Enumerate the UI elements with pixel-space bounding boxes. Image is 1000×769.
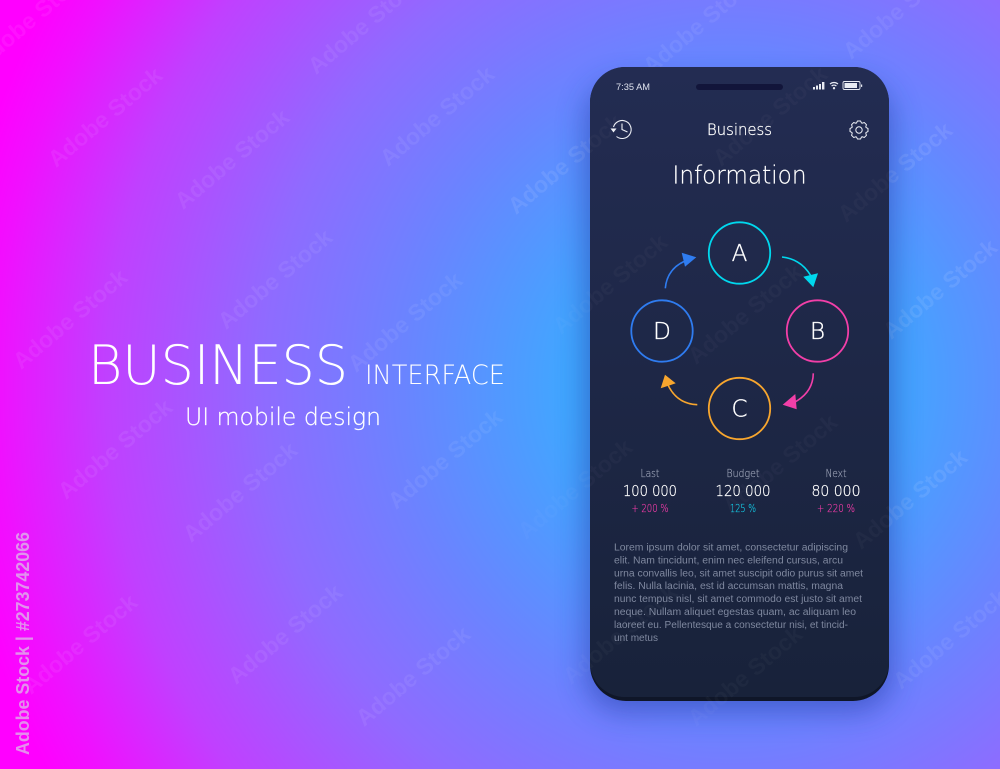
arrow: D to A (665, 253, 696, 288)
watermark pattern: background: Adobe Stock (213, 224, 337, 334)
watermark pattern: over phone: Adobe Stock (683, 621, 807, 731)
subtitle: INTERFACE: INTERFACE (365, 360, 505, 391)
watermark pattern: over phone: Adobe Stock (708, 61, 832, 171)
watermark pattern: background: Adobe Stock (8, 264, 132, 374)
tagline: UI mobile design (185, 403, 381, 431)
stat: last: Last (640, 468, 660, 480)
node C: C (731, 396, 748, 422)
stats row (623, 468, 860, 515)
node A: A (732, 241, 747, 267)
arrow: A to B (782, 257, 818, 287)
stat: budget (716, 468, 770, 515)
status bar time: 7:35 AM (616, 82, 650, 93)
arrow: B to C (783, 373, 813, 409)
watermark pattern: background: Adobe Stock (18, 589, 142, 699)
body paragraph: elit. Nam tincidunt, enim nec eleifend cursus, arcu (614, 556, 843, 566)
screen heading: Information (672, 160, 806, 190)
body paragraph (614, 542, 863, 644)
watermark pattern: over phone: Adobe Stock (833, 117, 957, 227)
screen title: Business (707, 120, 772, 139)
watermark pattern: over phone: Adobe Stock (878, 234, 1000, 344)
watermark pattern: over phone: Adobe Stock (513, 434, 637, 544)
arrow: C to D (661, 375, 697, 405)
stat: last: + 200 % (632, 503, 669, 515)
watermark pattern: background: Adobe Stock (383, 404, 507, 514)
node A (709, 222, 770, 284)
body paragraph: laoreet eu. Pellentesque a consectetur nisi, et tincid- (614, 620, 848, 631)
watermark pattern: over phone (503, 61, 1000, 731)
watermark pattern: background: Adobe Stock (178, 437, 302, 547)
phone mockup (590, 67, 889, 701)
body paragraph: felis. Nulla lacinia, est id accumsan mattis, magna (614, 581, 843, 592)
watermark pattern: background: Adobe Stock (43, 62, 167, 172)
watermark pattern: background: Adobe Stock (503, 109, 627, 219)
body paragraph: urna convallis leo, sit amet suscipit odio purus sit amet (614, 568, 863, 580)
watermark pattern: background: Adobe Stock (375, 61, 499, 171)
watermark pattern: background: Adobe Stock (343, 267, 467, 377)
stat: next: Next (826, 468, 846, 480)
node D: D (653, 319, 671, 345)
stat: last: 100 000 (623, 482, 677, 500)
cycle diagram (631, 222, 848, 439)
body paragraph: unt metus (614, 633, 658, 644)
stat: next: + 220 % (817, 503, 855, 515)
stat: next (812, 468, 860, 515)
stat: budget: 125 % (730, 503, 756, 515)
watermark pattern: background: Adobe Stock (878, 234, 1000, 344)
side credit text: Adobe Stock | #273742066 (13, 532, 33, 755)
watermark pattern: over phone: Adobe Stock (848, 444, 972, 554)
watermark pattern: over phone: Adobe Stock (558, 579, 682, 689)
phone shadow (585, 82, 893, 712)
watermark pattern: over phone: Adobe Stock (683, 259, 807, 369)
phone screen (590, 67, 889, 697)
body paragraph: Lorem ipsum dolor sit amet, consectetur adipiscing (614, 542, 848, 554)
watermark pattern: background: Adobe Stock (833, 117, 957, 227)
icon: history clock (610, 120, 631, 138)
watermark pattern: over phone: Adobe Stock (548, 229, 672, 339)
phone body (590, 67, 889, 701)
stat: next: 80 000 (812, 482, 860, 500)
icon: battery (843, 82, 862, 90)
watermark pattern: background: Adobe Stock (53, 394, 177, 504)
body paragraph: nunc tempus nisl, sit amet commodo est justo sit amet (614, 594, 862, 605)
node D (631, 300, 693, 362)
node B (787, 300, 848, 362)
headline: business interface (88, 334, 505, 431)
watermark pattern: background: Adobe Stock (223, 579, 347, 689)
stat: budget: Budget (726, 468, 760, 480)
node B: B (810, 319, 825, 345)
watermark pattern: background: Adobe Stock (351, 621, 475, 731)
watermark pattern: background: Adobe Stock (170, 104, 294, 214)
body paragraph: neque. Nullam aliquet egestas quam, ac aliquam leo (614, 607, 856, 618)
watermark pattern: over phone: Adobe Stock (503, 109, 627, 219)
icon: wifi (830, 82, 838, 89)
stat: last (623, 468, 677, 515)
watermark pattern: background: Adobe Stock (848, 444, 972, 554)
title: BUSINESS: BUSINESS (88, 334, 348, 397)
icon: settings gear (850, 121, 868, 139)
icon: signal bars (813, 82, 824, 90)
speaker notch (696, 84, 783, 90)
watermark pattern: over phone: Adobe Stock (718, 409, 842, 519)
stat: budget: 120 000 (716, 482, 770, 500)
node C (709, 378, 770, 439)
